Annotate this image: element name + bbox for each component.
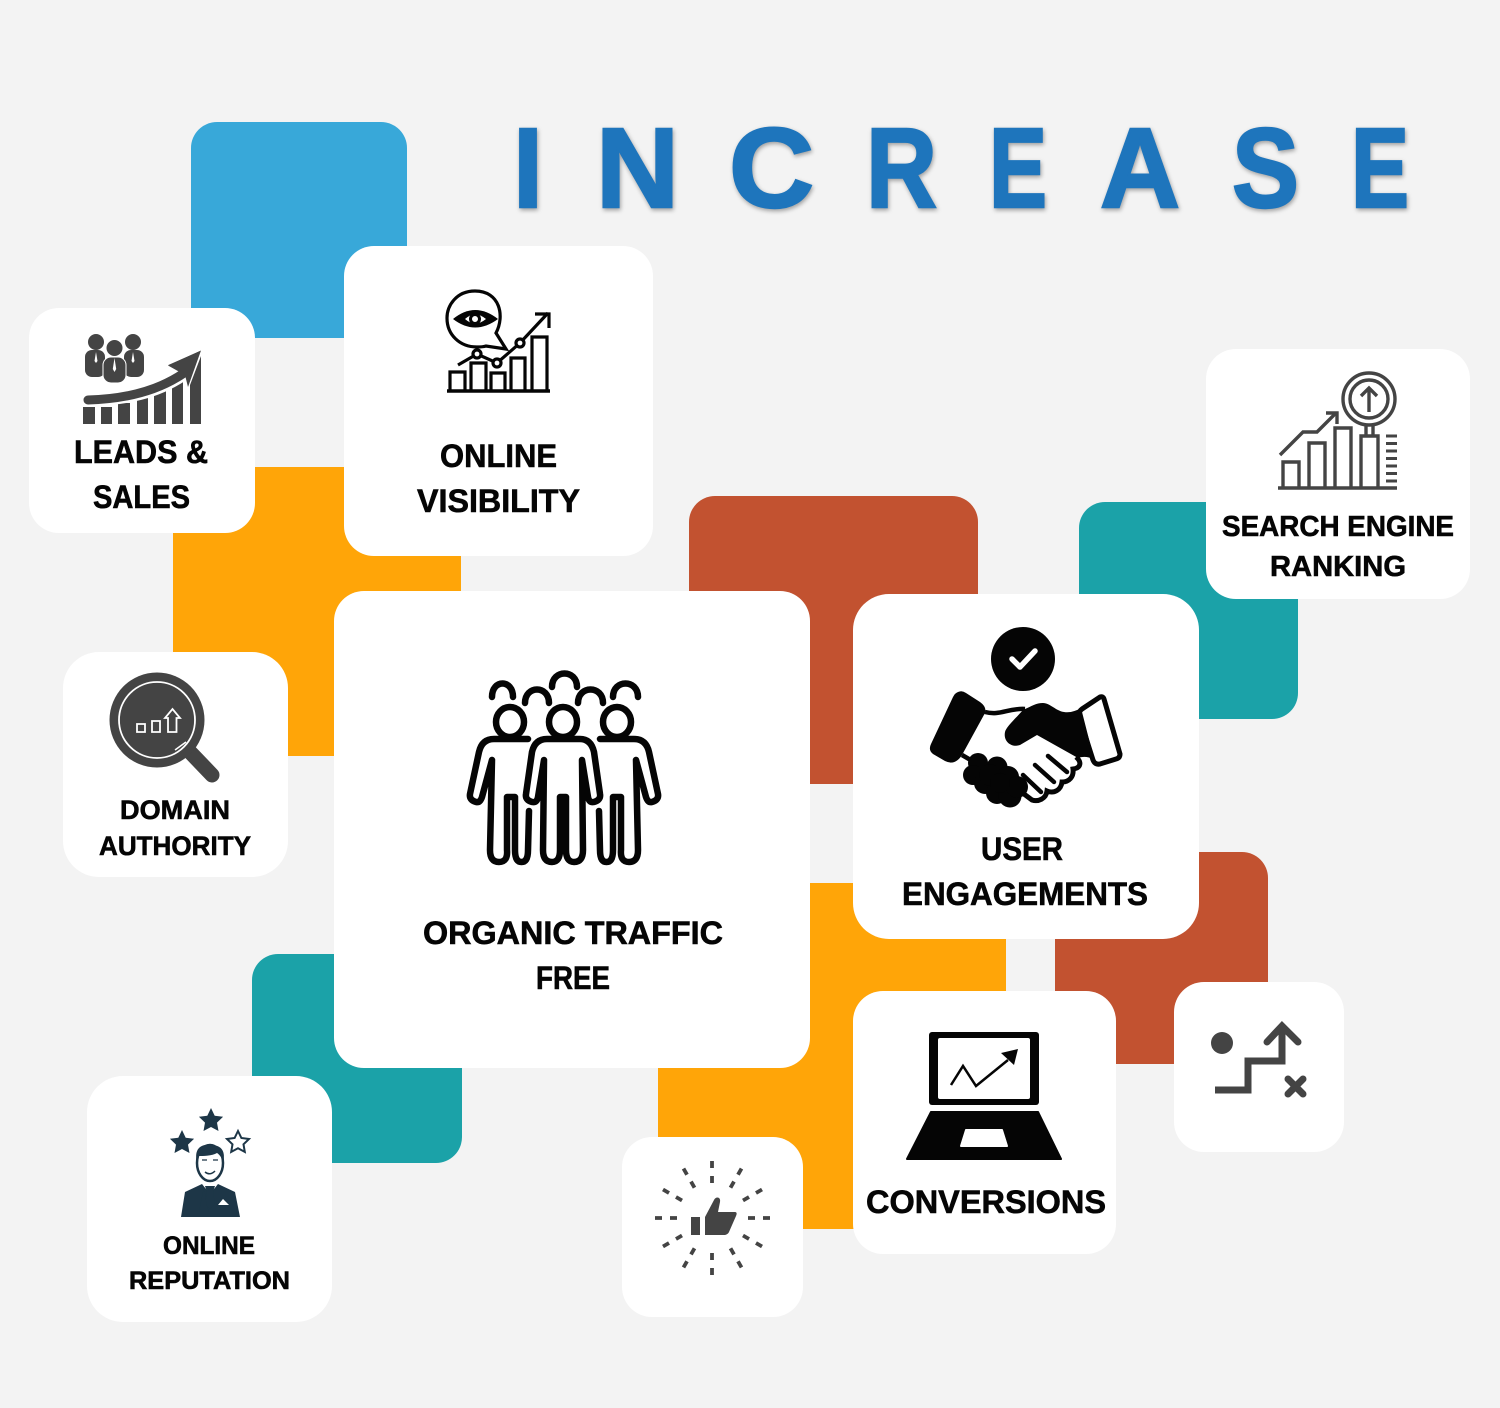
- panel: leads and sales: [29, 308, 255, 533]
- label: FREE: [536, 960, 610, 996]
- label: RANKING: [1270, 551, 1406, 583]
- label: [423, 915, 723, 996]
- label: ENGAGEMENTS: [902, 876, 1148, 912]
- panel: search engine ranking: [1206, 349, 1470, 599]
- orange square left: [173, 467, 461, 756]
- panel: online visibility: [344, 246, 653, 556]
- orange square lower: [658, 883, 1006, 1229]
- teal square right: [1079, 502, 1298, 719]
- label: SEARCH ENGINE: [1222, 511, 1454, 543]
- panel: domain authority: [63, 652, 288, 877]
- label: CONVERSIONS: [866, 1184, 1106, 1220]
- label: [417, 438, 580, 519]
- panel: conversions: [853, 991, 1116, 1254]
- label: SALES: [93, 479, 190, 515]
- label: AUTHORITY: [99, 831, 251, 861]
- label: REPUTATION: [129, 1267, 290, 1295]
- title: S: [1232, 105, 1299, 231]
- panel: organic traffic free: [334, 591, 810, 1068]
- label: [129, 1232, 290, 1295]
- icon: stairs arrow: [1211, 1026, 1303, 1094]
- icon: person with stars: [170, 1108, 249, 1217]
- icon: eye bubble and chart: [447, 291, 550, 391]
- title: A: [1100, 105, 1180, 231]
- teal square lower left: [252, 954, 462, 1163]
- title: C: [729, 105, 814, 231]
- label: VISIBILITY: [417, 483, 580, 519]
- title: N: [596, 105, 679, 231]
- icon: handshake with check: [930, 627, 1120, 808]
- title: R: [866, 105, 937, 231]
- label: USER: [981, 831, 1063, 867]
- label: ONLINE: [440, 438, 557, 474]
- blue square: [191, 122, 407, 338]
- icon: group of people: [470, 674, 658, 862]
- title: I: [513, 105, 543, 231]
- icon: thumbs up with rays: [655, 1161, 770, 1275]
- icon: magnifier with chart: [110, 672, 212, 775]
- label: [902, 831, 1148, 912]
- label: [99, 795, 251, 861]
- panel: user engagements: [853, 594, 1199, 939]
- red square lower right: [1055, 852, 1268, 1064]
- icon: laptop with chart: [907, 1032, 1061, 1159]
- panel: steps icon card: [1174, 982, 1344, 1152]
- icon: people and growth arrow: [83, 334, 201, 424]
- red square centre: [689, 496, 978, 784]
- panel: online reputation: [87, 1076, 332, 1322]
- title: E: [989, 105, 1047, 231]
- label: ORGANIC TRAFFIC: [423, 915, 723, 951]
- title: E: [1351, 105, 1409, 231]
- label: DOMAIN: [120, 795, 230, 825]
- label: [74, 434, 208, 515]
- label: [1222, 511, 1454, 583]
- title: [513, 105, 1409, 231]
- label: ONLINE: [163, 1232, 255, 1260]
- icon: chart with magnifier: [1278, 373, 1397, 488]
- panel: thumbs up card: [622, 1137, 803, 1317]
- label: LEADS &: [74, 434, 208, 470]
